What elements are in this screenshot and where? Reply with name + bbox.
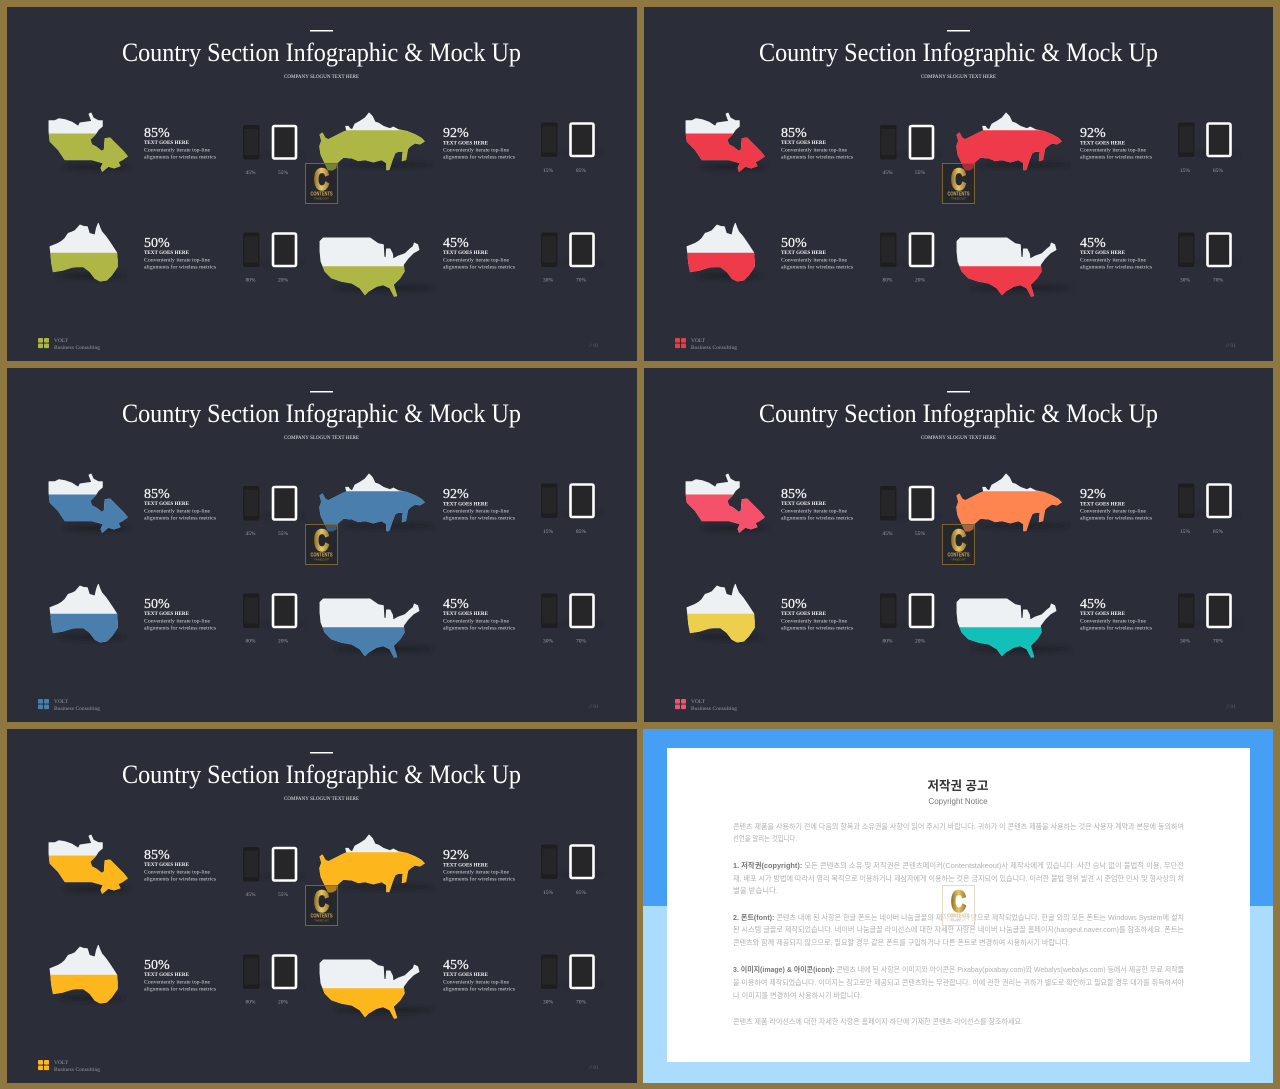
devices: row 2 left: 20%	[278, 278, 288, 284]
stat: Australia 50%: TEXT GOES HERE	[781, 250, 827, 256]
stat: Canada 85%: TEXT GOES HERE	[144, 140, 190, 146]
stat: Canada 85%: TEXT GOES HERE	[144, 501, 190, 507]
stat: Australia 50%	[781, 236, 853, 270]
stat: Australia 50%: 50%	[144, 597, 170, 612]
devices: row 2 right	[541, 594, 594, 644]
stat: Canada 85%	[144, 487, 216, 522]
stat: Australia 50%: TEXT GOES HERE	[144, 611, 190, 617]
stat: Russia 92%: alignments for wireless metrics	[443, 876, 515, 882]
devices: row 2 left: 80%	[883, 278, 893, 284]
stat: Canada 85%: Conveniently iterate top-line	[144, 508, 211, 514]
map: Canada	[49, 113, 127, 171]
devices: row 1 right: 15%	[1180, 168, 1190, 174]
section 3 images and icons	[733, 965, 1184, 1000]
stat: USA 45%: Conveniently iterate top-line	[1080, 618, 1147, 624]
section 1 copyright	[733, 861, 1184, 895]
slogan: COMPANY SLOGUN TEXT HERE	[284, 435, 360, 441]
devices: row 1 right	[1178, 122, 1230, 174]
page number: // 01	[1226, 343, 1236, 349]
stat: Russia 92%: 92%	[1080, 487, 1106, 502]
devices: row 1 left: 45%	[883, 531, 893, 537]
stat: Canada 85%: 85%	[781, 126, 807, 141]
map: USA	[320, 238, 419, 296]
map: Canada	[49, 474, 127, 532]
footer text	[691, 338, 737, 351]
map: Australia	[687, 584, 754, 642]
stat: Canada 85%: Conveniently iterate top-line	[781, 148, 848, 154]
stat: Russia 92%	[1080, 126, 1152, 160]
devices: row 1 left	[243, 847, 296, 898]
section 1 copyright: 재, 배포 시가 방법에 따라서 영리 목적으로 이용하거나 제삼자에게 이용하는 것은 금지되어 있습니다. 이러한 불법 행위 발견 시 준엄한 민사 및 형사상의 처	[733, 874, 1184, 883]
stat: Canada 85%: alignments for wireless metrics	[781, 154, 853, 160]
footer text	[54, 699, 100, 712]
footer logo	[675, 338, 686, 348]
footer text: VOLT	[54, 1060, 69, 1066]
footer logo	[675, 699, 686, 709]
devices: row 1 right: 85%	[576, 529, 586, 535]
stat: Russia 92%: TEXT GOES HERE	[1080, 502, 1126, 508]
map: Australia	[50, 945, 117, 1003]
stat: Russia 92%: Conveniently iterate top-line	[443, 148, 510, 154]
panel: slide 3 blue	[7, 368, 637, 722]
stat: Russia 92%: Conveniently iterate top-line	[1080, 508, 1147, 514]
stat: USA 45%: Conveniently iterate top-line	[1080, 258, 1147, 264]
devices: row 2 left	[243, 954, 296, 1006]
devices: row 1 right: 15%	[543, 168, 553, 174]
stat: USA 45%: alignments for wireless metrics	[443, 264, 515, 270]
footer text: Business Consulting	[54, 345, 100, 351]
watermark badge: slide 2: CONTENTS	[948, 192, 970, 198]
devices: row 2 right: 70%	[1213, 278, 1223, 284]
intro paragraph: 선언을 알리는 것입니다.	[733, 834, 797, 843]
stat: Russia 92%	[1080, 487, 1152, 522]
stat: Australia 50%: Conveniently iterate top-line	[144, 258, 211, 264]
watermark badge: slide 5: CONTENTS	[310, 914, 333, 920]
page number: // 01	[1226, 704, 1236, 710]
stat: Russia 92%: 92%	[443, 126, 469, 141]
map: Australia	[50, 584, 117, 642]
title: Country Section Infographic & Mock Up	[759, 38, 1158, 67]
stat: Canada 85%: Conveniently iterate top-line	[781, 508, 848, 514]
watermark badge: slide 4: C	[951, 524, 966, 558]
devices: row 1 left: 55%	[278, 531, 288, 537]
page number: // 01	[589, 1065, 599, 1071]
stat: Australia 50%	[781, 597, 853, 632]
map: Russia	[320, 474, 424, 531]
stat: Russia 92%: 92%	[1080, 126, 1106, 141]
watermark badge: slide 2: C	[951, 164, 966, 196]
devices: row 2 left: 80%	[246, 638, 256, 644]
watermark badge: slide 1: C	[314, 164, 329, 196]
devices: row 2 right	[541, 954, 594, 1006]
stat: Russia 92%: Conveniently iterate top-line	[1080, 148, 1147, 154]
stat: USA 45%: Conveniently iterate top-line	[443, 980, 510, 986]
stat: Australia 50%: 50%	[144, 958, 170, 973]
stat: Australia 50%	[144, 958, 216, 992]
stat: Russia 92%: TEXT GOES HERE	[443, 502, 489, 508]
stat: Russia 92%: TEXT GOES HERE	[443, 862, 489, 868]
footer logo	[38, 1060, 49, 1070]
devices: row 1 right: 85%	[1213, 168, 1223, 174]
section 2 fonts	[733, 913, 1184, 947]
devices: row 2 left: 20%	[278, 638, 288, 644]
map: Australia	[687, 223, 754, 281]
title: Country Section Infographic & Mock Up	[122, 399, 521, 428]
footer text: VOLT	[691, 338, 706, 344]
watermark badge: slide 5: TAKEOUT	[314, 918, 329, 922]
stat: USA 45%	[1080, 236, 1152, 270]
devices: row 1 left: 45%	[246, 531, 256, 537]
devices: row 2 left: 80%	[246, 278, 256, 284]
intro paragraph	[733, 822, 1184, 843]
footer text: VOLT	[54, 699, 69, 705]
stat: Australia 50%: 50%	[781, 597, 807, 612]
footer logo	[38, 699, 49, 709]
devices: row 1 left: 55%	[915, 170, 925, 176]
panel: slide 2 red	[644, 7, 1273, 361]
footer text	[691, 699, 737, 712]
devices: row 1 right: 15%	[543, 529, 553, 535]
watermark badge: slide 6: C	[951, 886, 966, 918]
stat: Russia 92%: 92%	[443, 848, 469, 863]
stat: Canada 85%	[781, 487, 853, 522]
devices: row 1 right	[541, 844, 594, 896]
stat: Russia 92%	[443, 487, 515, 522]
stat: Australia 50%: TEXT GOES HERE	[144, 250, 190, 256]
devices: row 1 left	[880, 125, 933, 176]
stat: Australia 50%: 50%	[781, 236, 807, 251]
slogan: COMPANY SLOGUN TEXT HERE	[284, 74, 360, 80]
devices: row 2 right: 70%	[576, 638, 586, 644]
stat: Canada 85%: Conveniently iterate top-line	[144, 148, 211, 154]
section 3 images and icons: 나 이미지를 변경하여 사용하시기 바랍니다.	[733, 991, 862, 1000]
devices: row 1 right: 15%	[543, 890, 553, 896]
devices: row 1 left	[243, 125, 296, 176]
watermark badge: slide 1	[306, 164, 338, 204]
footer text: Business Consulting	[691, 706, 737, 712]
devices: row 1 right: 15%	[1180, 529, 1190, 535]
stat: Canada 85%: 85%	[144, 848, 170, 863]
stat: Russia 92%: TEXT GOES HERE	[1080, 140, 1126, 146]
title: Country Section Infographic & Mock Up	[759, 399, 1158, 428]
stat: Australia 50%: alignments for wireless metrics	[144, 986, 216, 992]
stat: Russia 92%	[443, 848, 515, 882]
stat: Canada 85%	[781, 126, 853, 160]
stat: USA 45%: TEXT GOES HERE	[1080, 250, 1126, 256]
stat: USA 45%: TEXT GOES HERE	[443, 250, 489, 256]
stat: Australia 50%: alignments for wireless metrics	[144, 624, 216, 632]
stat: USA 45%: Conveniently iterate top-line	[443, 258, 510, 264]
stat: Australia 50%	[144, 236, 216, 270]
watermark badge: slide 4: CONTENTS	[948, 552, 970, 558]
stat: USA 45%: TEXT GOES HERE	[443, 972, 489, 978]
stat: Australia 50%: alignments for wireless metrics	[144, 264, 216, 270]
footer text: VOLT	[54, 338, 69, 344]
map: Russia	[320, 113, 424, 170]
stat: Canada 85%	[144, 126, 216, 160]
stat: Russia 92%: TEXT GOES HERE	[443, 140, 489, 146]
watermark badge: slide 6	[942, 886, 974, 926]
title: Country Section Infographic & Mock Up	[122, 38, 521, 67]
watermark badge: slide 5: C	[314, 886, 329, 918]
stat: USA 45%	[1080, 597, 1152, 632]
watermark badge: slide 5	[306, 886, 338, 926]
stat: USA 45%: 45%	[1080, 236, 1106, 251]
stat: Canada 85%	[144, 848, 216, 882]
stat: Australia 50%: Conveniently iterate top-line	[781, 258, 848, 264]
stat: Canada 85%: TEXT GOES HERE	[781, 501, 827, 507]
stat: Russia 92%: 92%	[443, 487, 469, 502]
devices: row 2 left	[243, 594, 296, 644]
stat: USA 45%: TEXT GOES HERE	[443, 611, 489, 617]
panel: slide 4 multicolour	[644, 368, 1273, 722]
map: USA	[320, 599, 419, 657]
footer text	[54, 338, 100, 351]
intro paragraph: 콘텐츠 제품을 사용하기 전에 다음의 항목과 소유권을 사항이 읽어 주시기 바랍니다. 귀하가 이 콘텐츠 제품을 사용하는 것은 사용자 계약과 본문에 동의하여	[733, 822, 1184, 831]
devices: row 2 right: 70%	[1213, 638, 1223, 644]
devices: row 2 left	[243, 232, 296, 284]
devices: row 2 left	[880, 594, 933, 644]
stat: Russia 92%: Conveniently iterate top-line	[443, 870, 510, 876]
map: USA	[957, 599, 1056, 657]
stat: Australia 50%: 50%	[144, 236, 170, 251]
slogan: COMPANY SLOGUN TEXT HERE	[921, 435, 997, 441]
stat: USA 45%: 45%	[443, 597, 469, 612]
watermark badge: slide 6: TAKEOUT	[951, 918, 966, 922]
devices: row 2 left: 20%	[278, 1000, 288, 1006]
watermark badge: slide 3: CONTENTS	[310, 552, 333, 558]
stat: USA 45%: alignments for wireless metrics	[443, 986, 515, 992]
stat: Russia 92%: alignments for wireless metrics	[443, 154, 515, 160]
devices: row 2 left: 20%	[915, 278, 925, 284]
stat: Australia 50%: TEXT GOES HERE	[144, 972, 190, 978]
section 2 fonts: 2. 폰트(font): 콘텐츠 내에 된 사항은 한글 폰트는 네이버 나눔글꼴의 제작물을 바탕으로 제작되었습니다. 한글 외의 모든 폰트는 Windows System에 설치	[733, 913, 1184, 922]
stat: USA 45%: Conveniently iterate top-line	[443, 618, 510, 624]
watermark badge: slide 2: TAKEOUT	[951, 196, 966, 200]
section 1 copyright: 벌을 받습니다.	[733, 886, 778, 895]
footer text: Business Consulting	[54, 706, 100, 712]
watermark badge: slide 2	[942, 164, 974, 204]
devices: row 1 left	[243, 486, 296, 537]
devices: row 1 left: 55%	[278, 170, 288, 176]
stat: Canada 85%: 85%	[144, 487, 170, 502]
stat: Australia 50%: Conveniently iterate top-line	[781, 618, 848, 624]
stat: Russia 92%: alignments for wireless metrics	[443, 514, 515, 522]
stat: Canada 85%: alignments for wireless metrics	[781, 514, 853, 522]
devices: row 2 right: 30%	[543, 638, 553, 644]
stat: USA 45%: 45%	[1080, 597, 1106, 612]
stat: Australia 50%: Conveniently iterate top-line	[144, 980, 211, 986]
stat: Canada 85%: alignments for wireless metrics	[144, 154, 216, 160]
panel: slide 6 copyright notice	[643, 729, 1273, 1083]
map: USA	[320, 960, 419, 1018]
stat: Canada 85%: 85%	[144, 126, 170, 141]
stat: Canada 85%: TEXT GOES HERE	[781, 140, 827, 146]
devices: row 2 right: 30%	[1180, 638, 1190, 644]
watermark badge: slide 6: CONTENTS	[948, 914, 970, 920]
devices: row 2 right	[1178, 232, 1230, 284]
stat: Australia 50%	[144, 597, 216, 632]
devices: row 1 right: 85%	[576, 168, 586, 174]
stat: USA 45%: alignments for wireless metrics	[443, 624, 515, 632]
slogan: COMPANY SLOGUN TEXT HERE	[284, 796, 360, 802]
map: Canada	[686, 474, 764, 532]
watermark badge: slide 3	[306, 524, 338, 564]
section 3 images and icons: 을 이용하여 제작되었습니다. 이미지는 참고로만 제공되고 콘텐츠와는 무관합니다. 이에 관한 권리는 귀하가 별도로 확인하고 필요할 경우 대가를 취득하셔야	[733, 978, 1184, 987]
stat: USA 45%: TEXT GOES HERE	[1080, 611, 1126, 617]
stat: Australia 50%: alignments for wireless metrics	[781, 624, 853, 632]
stat: USA 45%	[443, 597, 515, 632]
devices: row 2 left: 80%	[246, 1000, 256, 1006]
devices: row 2 right	[1178, 594, 1230, 644]
title: Country Section Infographic & Mock Up	[122, 760, 521, 789]
devices: row 1 left: 45%	[246, 892, 256, 898]
devices: row 2 right	[541, 232, 594, 284]
stat: Canada 85%: Conveniently iterate top-line	[144, 870, 211, 876]
stat: Russia 92%	[443, 126, 515, 160]
map: Russia	[320, 835, 424, 892]
section 2 fonts: 된 시스템 글꼴로 제작되었습니다. 네이버 나눔글꼴 라이선스에 대한 자세한 사항은 네이버 나눔글꼴 홈페이지(hangeul.naver.com)를 참조하세요. 폰트는	[733, 925, 1184, 934]
footer text	[54, 1060, 100, 1073]
footer text: VOLT	[691, 699, 706, 705]
footer logo	[38, 338, 49, 348]
stat: Canada 85%: alignments for wireless metrics	[144, 514, 216, 522]
panel: slide 1 olive	[7, 7, 637, 361]
devices: row 1 right: 85%	[576, 890, 586, 896]
stat: Australia 50%: TEXT GOES HERE	[781, 611, 827, 617]
stat: USA 45%	[443, 236, 515, 270]
section 3 images and icons: 3. 이미지(image) & 아이콘(icon): 콘텐츠 내에 된 사항은 이미지와 아이콘은 Pixabay(pixabay.com)와 Webalys(webalys.com) 등에서 제공한 무료 저작물	[733, 965, 1184, 974]
copyright heading: 저작권 공고	[928, 778, 988, 793]
stat: USA 45%	[443, 958, 515, 992]
section 1 copyright: 1. 저작권(copyright): 모든 콘텐츠의 소유 및 저작권은 콘텐츠메이커(Contentstakeout)사 제작사에게 있습니다. 사전 승낙 없이 불법적 이용, 무단전	[733, 861, 1184, 870]
section 2 fonts: 콘텐츠와 함께 제공되지 않으므로, 필요할 경우 같은 폰트를 구입하거나 다른 폰트로 변경하여 사용하시기 바랍니다.	[733, 938, 1070, 947]
watermark badge: slide 1: TAKEOUT	[314, 196, 329, 200]
stat: Canada 85%: alignments for wireless metrics	[144, 876, 216, 882]
stat: Russia 92%: Conveniently iterate top-line	[443, 508, 510, 514]
stat: Canada 85%: TEXT GOES HERE	[144, 862, 190, 868]
map: Australia	[50, 223, 117, 281]
stat: Canada 85%: 85%	[781, 487, 807, 502]
stat: USA 45%: alignments for wireless metrics	[1080, 624, 1152, 632]
map: USA	[957, 238, 1056, 296]
devices: row 1 left	[880, 486, 933, 537]
devices: row 1 right: 85%	[1213, 529, 1223, 535]
stat: Russia 92%: alignments for wireless metrics	[1080, 154, 1152, 160]
devices: row 1 left: 55%	[278, 892, 288, 898]
page number: // 01	[589, 704, 599, 710]
map: Canada	[686, 113, 764, 171]
watermark badge: slide 3: TAKEOUT	[314, 558, 329, 562]
devices: row 1 right	[541, 484, 594, 535]
devices: row 2 left: 20%	[915, 638, 925, 644]
stat: USA 45%: 45%	[443, 236, 469, 251]
map: Russia	[957, 474, 1061, 531]
devices: row 1 right	[1178, 484, 1230, 535]
map: Canada	[49, 835, 127, 893]
footer text: Business Consulting	[691, 345, 737, 351]
devices: row 2 right: 30%	[543, 278, 553, 284]
watermark badge: slide 4	[942, 524, 974, 564]
stat: Russia 92%: alignments for wireless metrics	[1080, 514, 1152, 522]
devices: row 2 right: 30%	[543, 1000, 553, 1006]
footer text: Business Consulting	[54, 1067, 100, 1073]
devices: row 2 right: 30%	[1180, 278, 1190, 284]
devices: row 2 right: 70%	[576, 1000, 586, 1006]
devices: row 2 left: 80%	[883, 638, 893, 644]
copyright subheading: Copyright Notice	[928, 797, 988, 806]
stat: Australia 50%: alignments for wireless metrics	[781, 264, 853, 270]
devices: row 1 left: 55%	[915, 531, 925, 537]
closing line: 콘텐츠 제품 라이선스에 대한 자세한 사항은 홈페이지 하단에 기재한 콘텐츠 라이선스를 참조하세요.	[733, 1017, 1023, 1026]
watermark badge: slide 4: TAKEOUT	[951, 558, 966, 562]
page number: // 01	[589, 343, 599, 349]
stat: USA 45%: 45%	[443, 958, 469, 973]
map: Russia	[957, 113, 1061, 170]
watermark badge: slide 3: C	[314, 524, 329, 558]
devices: row 1 right	[541, 122, 594, 174]
stat: USA 45%: alignments for wireless metrics	[1080, 264, 1152, 270]
devices: row 1 left: 45%	[883, 170, 893, 176]
panel: slide 5 yellow	[7, 729, 637, 1083]
slogan: COMPANY SLOGUN TEXT HERE	[921, 74, 997, 80]
stat: Australia 50%: Conveniently iterate top-line	[144, 618, 211, 624]
devices: row 1 left: 45%	[246, 170, 256, 176]
devices: row 2 right: 70%	[576, 278, 586, 284]
devices: row 2 left	[880, 232, 933, 284]
watermark badge: slide 1: CONTENTS	[310, 192, 333, 198]
